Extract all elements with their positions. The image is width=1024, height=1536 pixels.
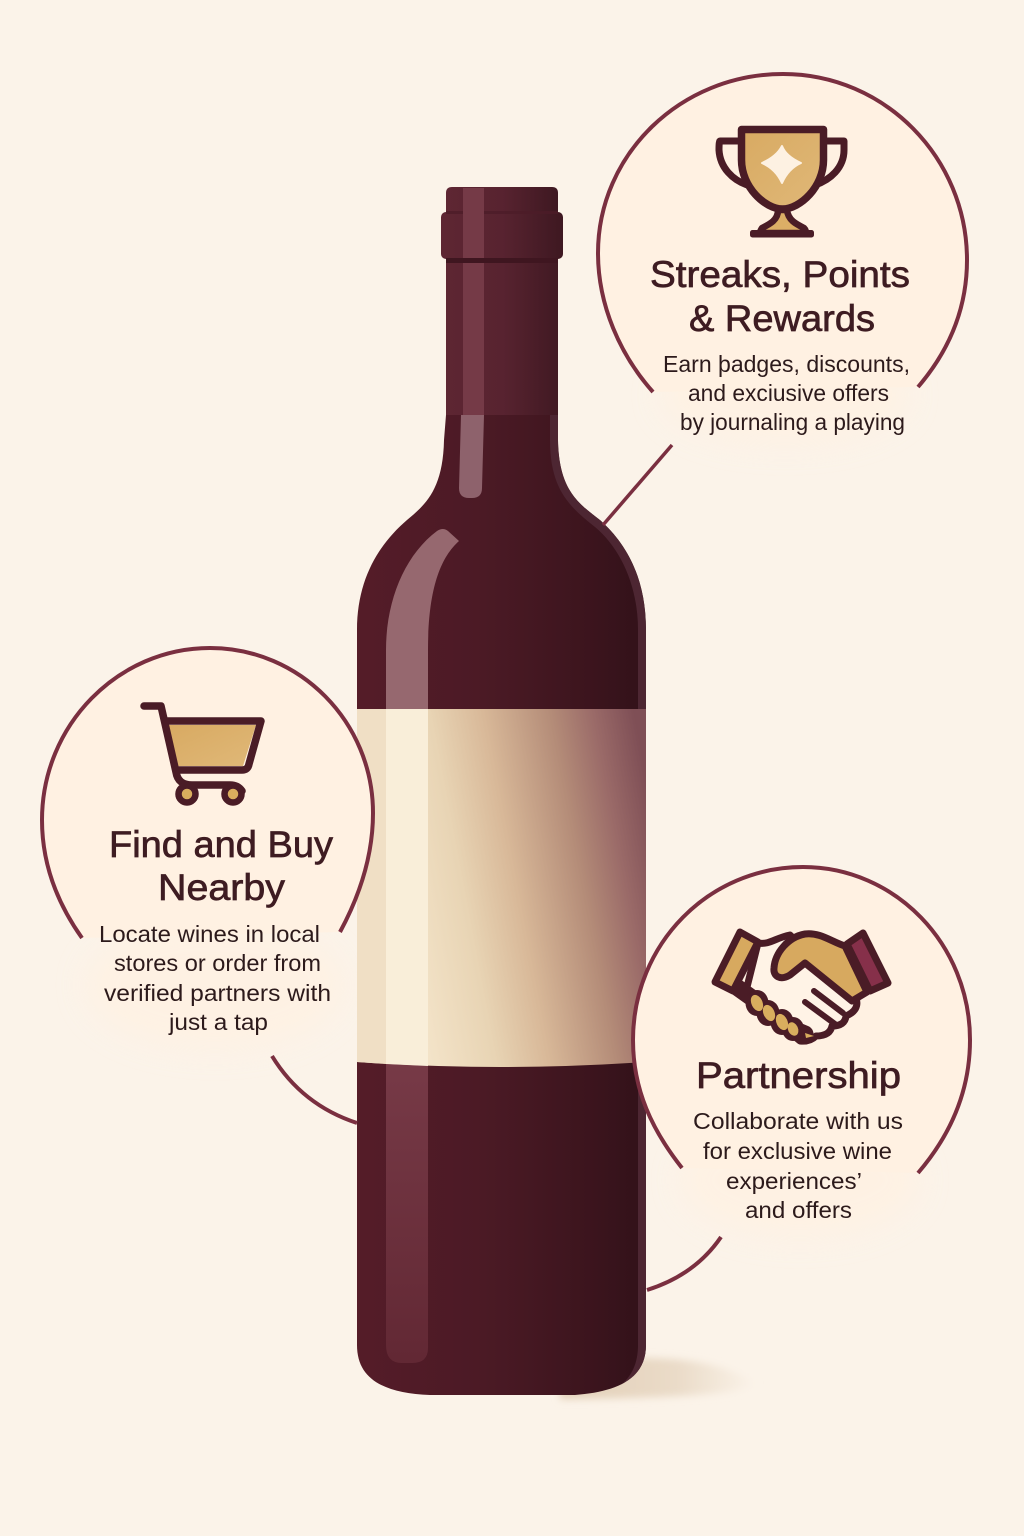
description: Locate wines in local <box>99 921 320 947</box>
heading: Partnership <box>696 1055 901 1096</box>
heading <box>109 824 334 908</box>
heading: Find and Buy <box>109 824 334 865</box>
connector curve <box>647 1237 721 1290</box>
bottle ground shadow <box>560 1358 755 1399</box>
finger lines <box>805 991 843 1024</box>
neck highlight <box>463 262 484 415</box>
description: stores or order from <box>114 950 321 976</box>
label highlight <box>386 709 428 1066</box>
gold hand <box>774 934 867 1001</box>
description: for exclusive wine <box>703 1138 892 1164</box>
wine bottle <box>357 187 646 1395</box>
left cuff <box>715 932 758 991</box>
heading: Streaks, Points <box>650 254 910 295</box>
description: Collaborate with us <box>693 1108 903 1134</box>
description: verified partners with <box>104 980 331 1006</box>
description: and offers <box>745 1197 852 1223</box>
bottle label <box>357 709 646 1067</box>
description <box>99 921 331 1035</box>
upper neck glass <box>446 263 530 415</box>
bottle body <box>357 263 646 1395</box>
right cuff <box>847 933 888 991</box>
neck lower highlight <box>459 415 484 498</box>
description: and exciusive offers <box>688 380 889 406</box>
label left strip <box>357 709 386 1064</box>
callout circle <box>633 867 970 1173</box>
icon: shopping cart <box>144 706 261 802</box>
callout: find and buy nearby <box>42 648 373 1123</box>
description: just a tap <box>168 1009 268 1035</box>
bubble glow under callout text <box>85 345 920 1238</box>
heading <box>650 254 910 339</box>
description: experiences’ <box>726 1168 862 1194</box>
heading: Nearby <box>158 867 286 908</box>
right rim light <box>550 415 646 1391</box>
connector line <box>603 445 672 525</box>
connector curve <box>272 1056 357 1123</box>
description: by journaling a playing <box>680 409 905 435</box>
description: Earn þadges, discounts, <box>663 351 910 377</box>
knuckles <box>738 988 814 1041</box>
heading: & Rewards <box>689 298 875 339</box>
callout: partnership <box>633 867 970 1290</box>
capsule top <box>441 187 563 263</box>
description <box>663 351 910 435</box>
shoulder highlight <box>386 529 459 712</box>
icon: trophy <box>719 130 844 238</box>
description <box>693 1108 903 1223</box>
callout circle <box>42 648 373 938</box>
icon: handshake <box>715 932 888 1041</box>
callout circle <box>598 74 967 392</box>
pale hand <box>745 935 857 1041</box>
lower highlight <box>386 1060 428 1363</box>
callout: streaks, points and rewards <box>598 74 967 525</box>
